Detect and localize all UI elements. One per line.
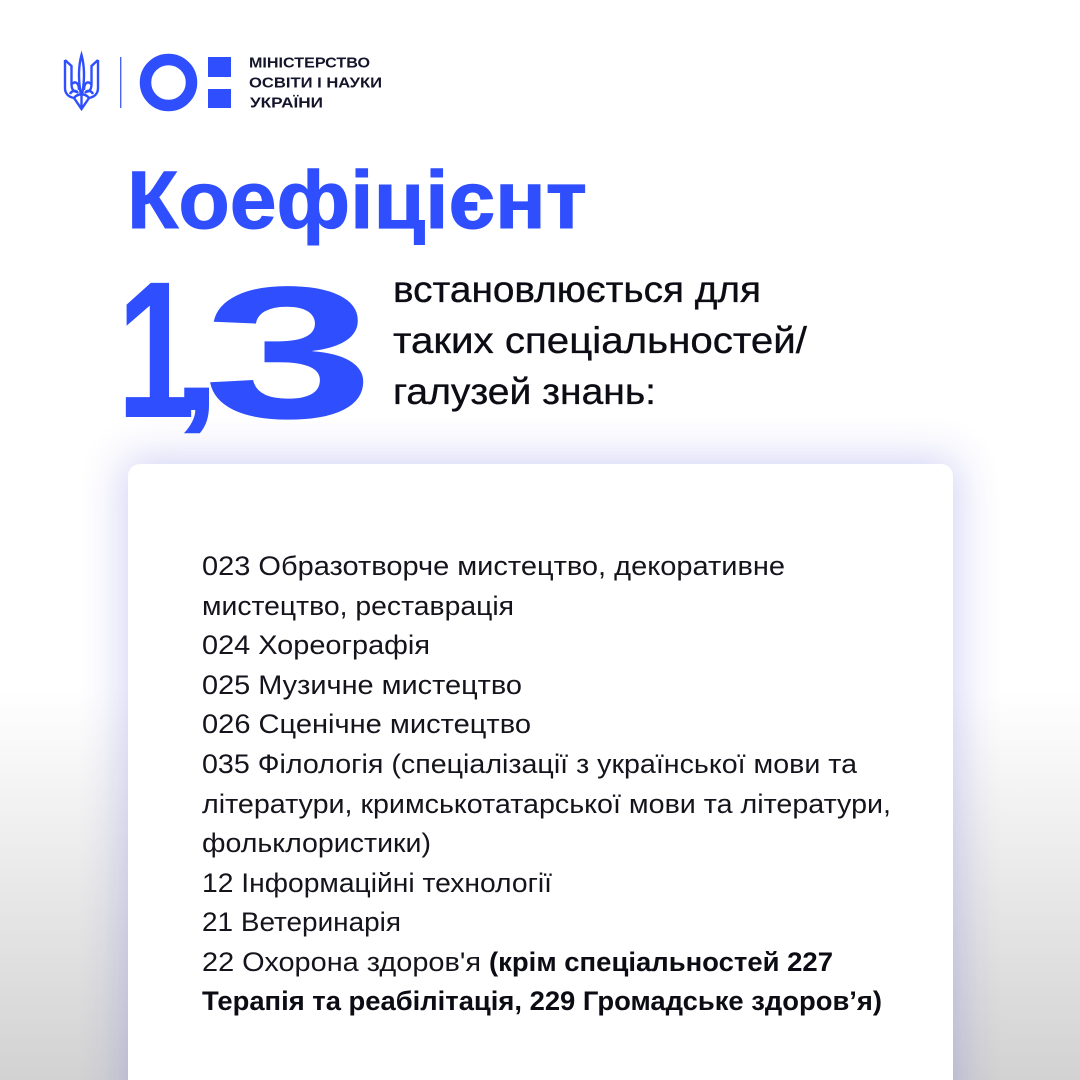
- icon: trident: [65, 55, 98, 109]
- big number: ,: [172, 274, 221, 442]
- list of specialties: 023 Образотворче мистецтво, декоративне: [202, 551, 785, 581]
- list of specialties: 12 Інформаційні технології: [202, 868, 553, 898]
- big number: 3: [203, 248, 374, 458]
- logo text: МІНІСТЕРСТВО: [249, 56, 370, 72]
- icon: ring: [146, 60, 192, 106]
- list of specialties: 026 Сценічне мистецтво: [202, 709, 531, 739]
- list of specialties: 21 Ветеринарія: [202, 907, 401, 937]
- logo text: УКРАЇНИ: [250, 94, 323, 112]
- list of specialties: 22 Охорона здоров'я: [202, 947, 481, 977]
- subtitle: встановлюється для: [393, 269, 761, 310]
- logo: ministry of education and science: [65, 55, 382, 112]
- list of specialties: (крім спеціальностей 227: [489, 947, 833, 977]
- divider: [120, 57, 121, 108]
- list of specialties: 024 Хореографія: [202, 630, 430, 660]
- logo text: [249, 56, 382, 112]
- panel: white card: [128, 464, 953, 1080]
- list of specialties: 035 Філологія (спеціалізації з української мови та: [202, 749, 858, 779]
- list of specialties: 025 Музичне мистецтво: [202, 670, 522, 700]
- subtitle: таких спеціальностей/: [393, 320, 808, 361]
- logo text: ОСВІТИ І НАУКИ: [249, 76, 382, 92]
- icon: squares: [208, 57, 231, 108]
- list of specialties: літератури, кримськотатарської мови та літератури,: [202, 789, 891, 819]
- list of specialties: фольклористики): [202, 828, 431, 858]
- title: Коефіцієнт: [127, 155, 587, 246]
- big number: 1: [117, 241, 195, 459]
- subtitle: галузей знань:: [393, 371, 656, 412]
- big number: [117, 241, 374, 459]
- list of specialties: мистецтво, реставрація: [202, 591, 514, 621]
- list of specialties: [202, 551, 891, 1016]
- subtitle: [393, 269, 808, 412]
- list of specialties: Терапія та реабілітація, 229 Громадське здоров’я): [202, 986, 882, 1016]
